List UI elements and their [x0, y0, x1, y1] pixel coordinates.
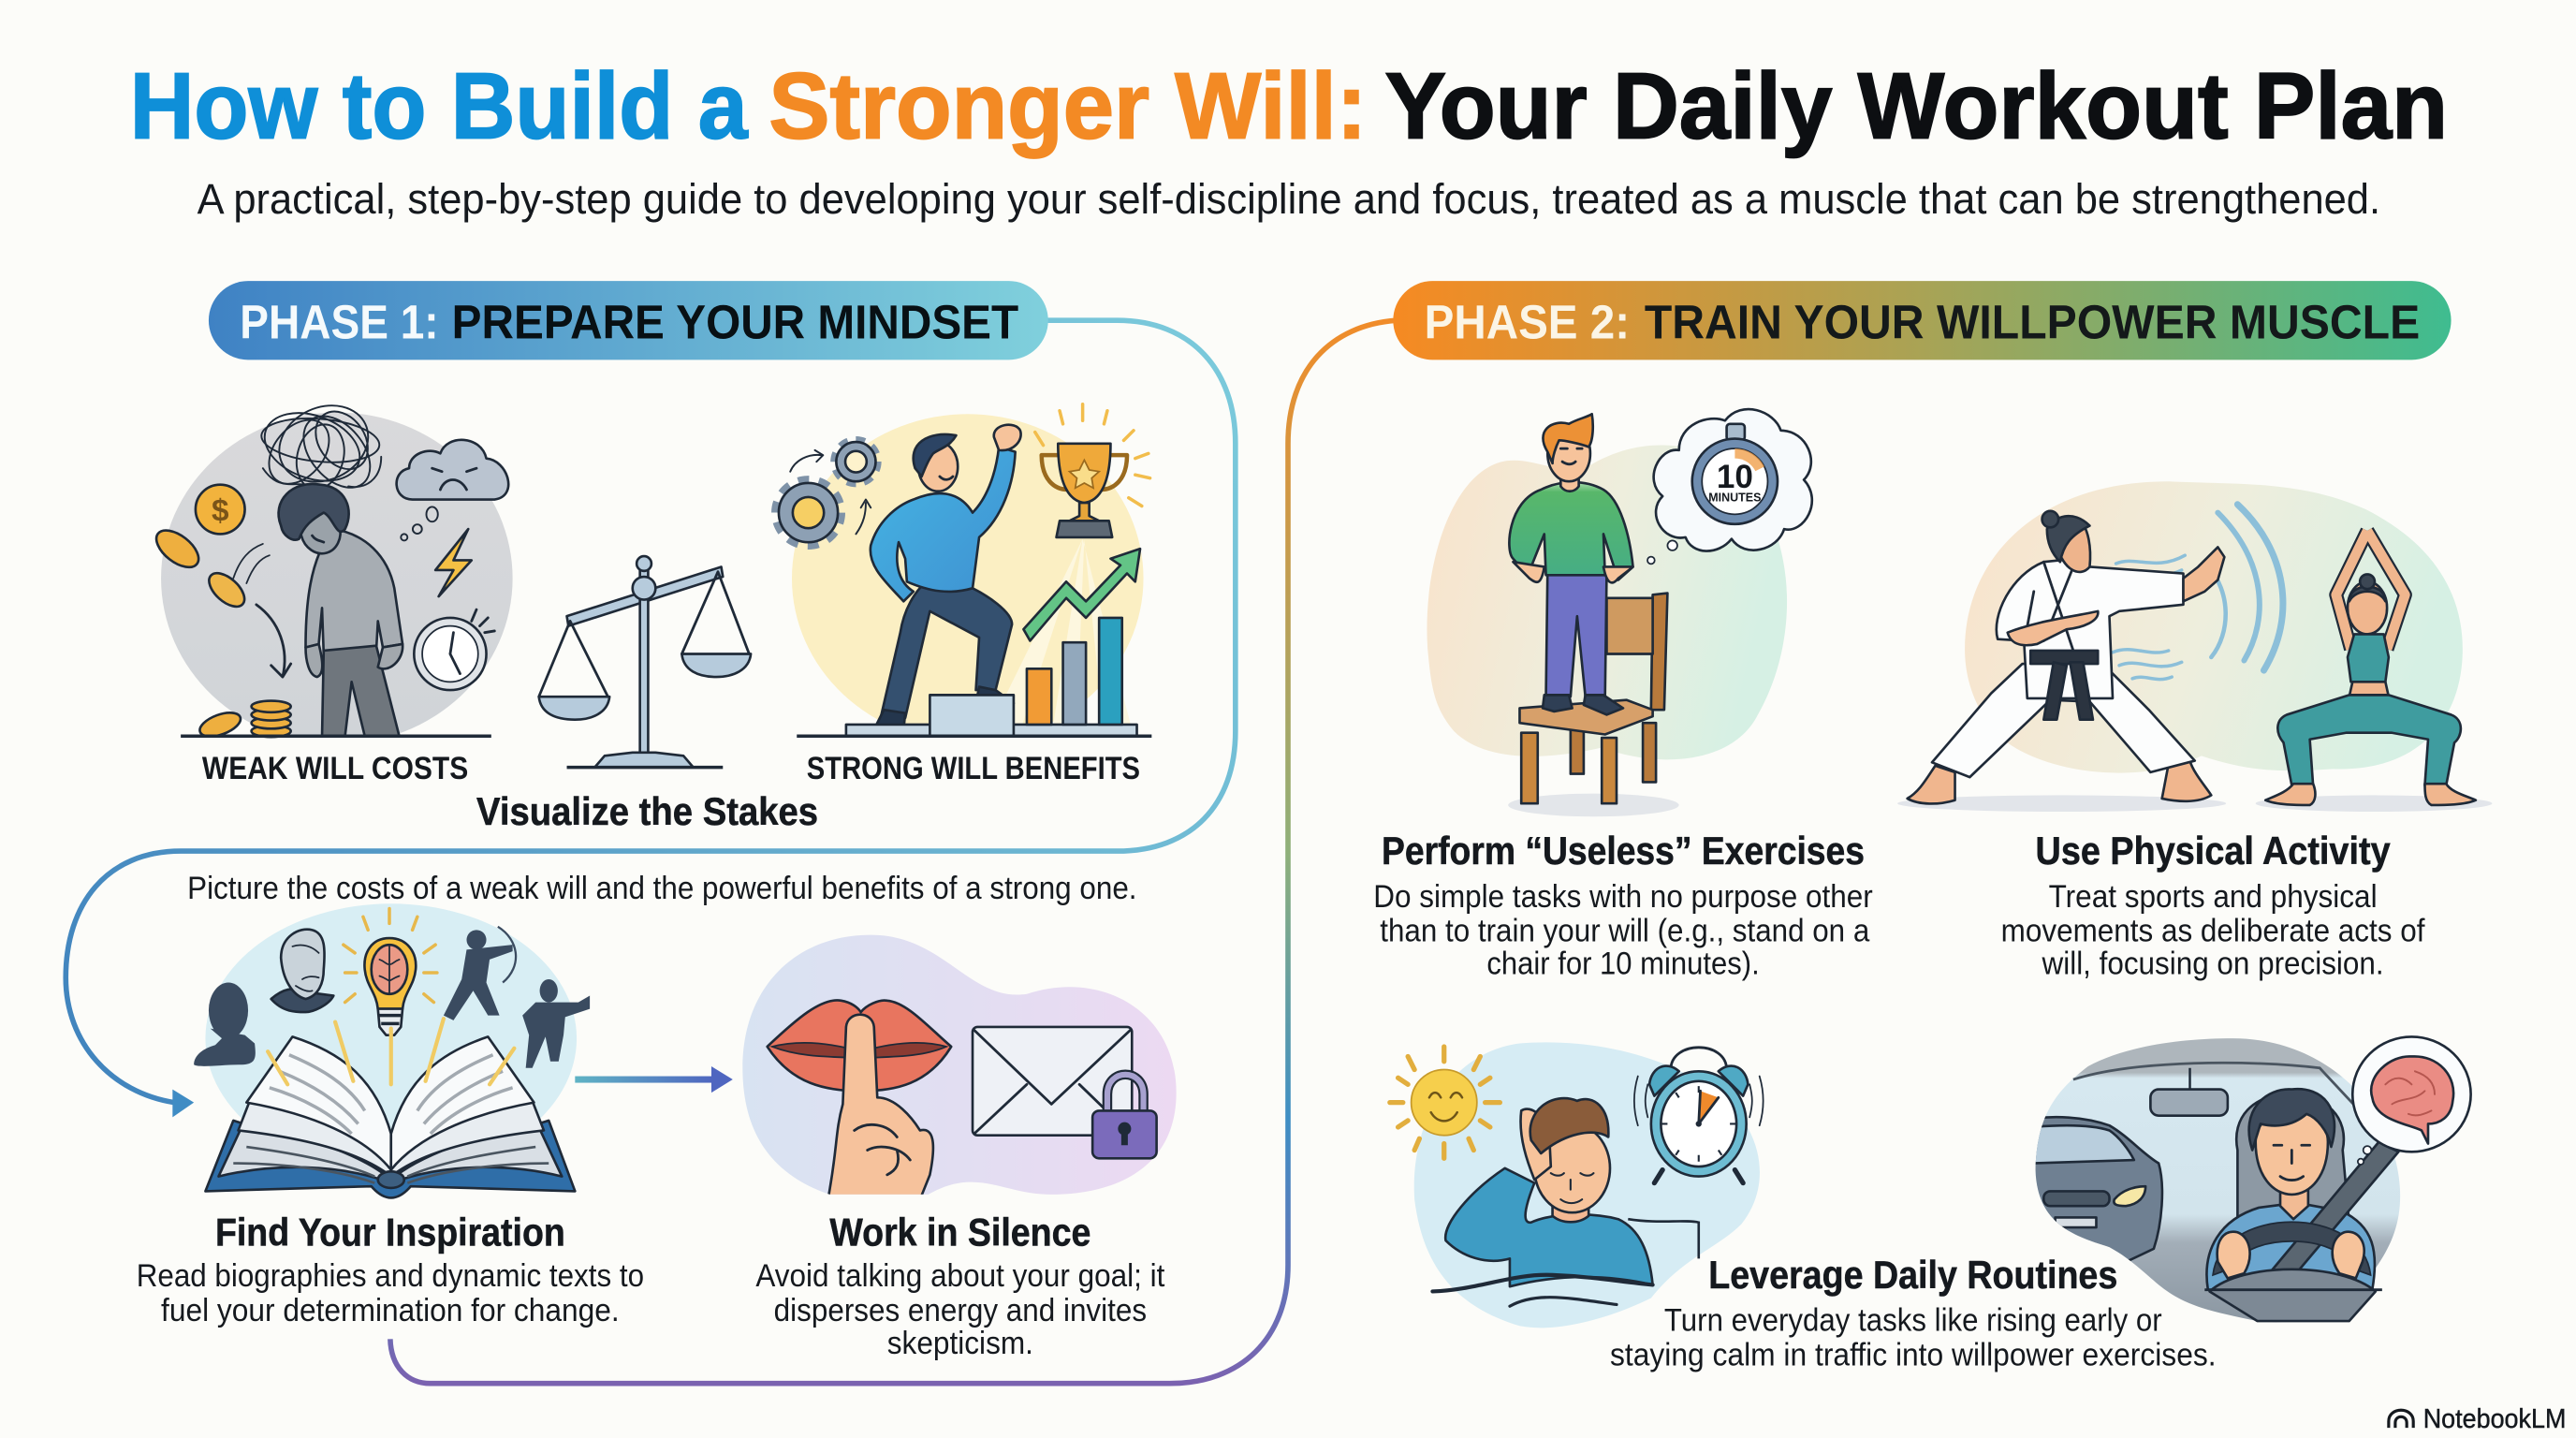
figure: slumped person: [279, 484, 402, 736]
icon: envelope: [973, 1027, 1132, 1136]
sunbeams: [986, 539, 1134, 736]
portrait: bearded elder: [271, 930, 333, 1012]
icon: rear view mirror: [2150, 1068, 2228, 1116]
text: visualize description: Picture the costs of a weak will and the powerful benefits of a strong one.: [187, 871, 1137, 906]
figure: man on chair: [1509, 414, 1633, 714]
heading: visualize the stakes: Visualize the Stakes: [476, 789, 818, 833]
figure: calm driver: [2204, 1089, 2398, 1321]
thought bubble: ten minutes stopwatch: 10: [1717, 459, 1753, 495]
thought bubble: brain: [2352, 1036, 2471, 1165]
phase 2 header: [1393, 281, 2452, 360]
text: physical activity: will, focusing on precision.: [2042, 946, 2384, 982]
text: physical activity: Treat sports and physical: [2049, 879, 2378, 915]
title: Your Daily Workout Plan: [1385, 53, 2448, 158]
illustration: traffic routine: [2021, 1036, 2471, 1322]
ground line: [797, 735, 1151, 737]
figure: yoga pose: [2265, 531, 2476, 805]
illustration: weak will costs: [150, 391, 513, 744]
icon: tangled thoughts: [256, 391, 384, 500]
phase 1 header: PHASE 1:: [240, 296, 439, 349]
arrow: inspiration to silence: [575, 1066, 733, 1093]
text: physical activity: movements as deliberate acts of: [2001, 914, 2425, 949]
icon: dollar coin: [196, 485, 245, 534]
heading: leverage daily routines: Leverage Daily Routines: [1708, 1253, 2117, 1297]
text: find your inspiration: [137, 1258, 644, 1328]
icon: chair: [1519, 594, 1667, 803]
icon: alarm clock: [1634, 1048, 1764, 1183]
text: useless exercises: chair for 10 minutes).: [1486, 946, 1760, 982]
text: useless exercises: than to train your will (e.g., stand on a: [1380, 914, 1870, 949]
text: useless exercises: [1373, 879, 1873, 982]
figure: triumphant person: [871, 425, 1021, 729]
icon: dollar coin: $: [212, 493, 229, 528]
icon: padlock: [1092, 1075, 1157, 1158]
phase 2 header: TRAIN YOUR WILLPOWER MUSCLE: [1645, 296, 2420, 349]
text: work in silence: skepticism.: [887, 1326, 1033, 1361]
icon: coin stack: [197, 701, 291, 741]
connector: phase 1 loop: [66, 320, 1236, 1117]
icon: pillow: [1628, 1219, 1699, 1258]
heading: useless exercises: Perform “Useless” Exercises: [1382, 829, 1865, 873]
text: find your inspiration: fuel your determination for change.: [161, 1293, 620, 1328]
text: leverage daily routines: Turn everyday tasks like rising early or: [1664, 1303, 2162, 1339]
illustration: find your inspiration: [194, 903, 590, 1197]
icon: falling coins: [150, 523, 291, 677]
figure: karate stance: [1908, 511, 2224, 803]
shadow: [1508, 794, 1679, 816]
heading: physical activity: Use Physical Activity: [2036, 829, 2391, 873]
icon: trophy: [1035, 404, 1150, 537]
label: weak will costs: WEAK WILL COSTS: [202, 751, 468, 786]
ground line: [181, 735, 491, 737]
car interior frame: [2073, 1063, 2365, 1117]
text: useless exercises: Do simple tasks with no purpose other: [1373, 879, 1873, 915]
silhouette: portrait man: [194, 983, 256, 1066]
silhouette: archer: [444, 927, 516, 1020]
text: work in silence: disperses energy and invites: [774, 1293, 1147, 1328]
thought bubble: ten minutes stopwatch: MINUTES: [1708, 490, 1762, 504]
illustration: useless exercises: [1427, 409, 1812, 816]
icon: thought dots: [401, 506, 438, 540]
text: work in silence: [755, 1258, 1165, 1361]
chart: rising bars with arrow: [846, 549, 1140, 736]
blanket: [1432, 1275, 1653, 1306]
illustration: work in silence: [742, 935, 1177, 1208]
subtitle: A practical, step-by-step guide to developing your self-discipline and focus, treated as a muscle that can be strengthened.: [198, 175, 2380, 223]
text: physical activity: [2001, 879, 2425, 982]
icon: lightning: [435, 529, 472, 596]
thought bubble: ten minutes stopwatch: [1647, 409, 1812, 564]
icon: clock: [414, 609, 494, 690]
heading: work in silence: Work in Silence: [829, 1210, 1090, 1254]
title: How to Build a: [130, 53, 749, 158]
phase 2 header: PHASE 2:: [1425, 296, 1630, 349]
illustration: strong will benefits: [779, 404, 1151, 772]
connector: phase 2 loop: [390, 320, 1397, 1384]
heading: find your inspiration: Find Your Inspiration: [215, 1210, 565, 1254]
figure: waking person: [1445, 1098, 1653, 1286]
shadows: [1897, 795, 2492, 812]
text: work in silence: Avoid talking about your goal; it: [755, 1258, 1165, 1294]
text: find your inspiration: Read biographies and dynamic texts to: [137, 1258, 644, 1294]
icon: smiling sun: [1390, 1047, 1500, 1158]
text: leverage daily routines: [1610, 1303, 2217, 1372]
icon: hushing hand: [827, 1015, 933, 1208]
phase 1 header: PREPARE YOUR MINDSET: [452, 296, 1018, 349]
phase 1 header: [209, 281, 1048, 360]
icon: sad cloud: [397, 440, 508, 500]
arrow head: into inspiration: [172, 1090, 194, 1117]
icon: open book: [205, 1019, 575, 1197]
text: leverage daily routines: staying calm in traffic into willpower exercises.: [1610, 1337, 2217, 1372]
title: [130, 53, 2448, 158]
icon: balance scale: [539, 556, 751, 768]
label: strong will benefits: STRONG WILL BENEFITS: [807, 751, 1140, 786]
icon: car ahead: [2035, 1116, 2164, 1261]
icon: lips: [768, 1000, 951, 1091]
logo: NotebookLM: NotebookLM: [2423, 1404, 2566, 1434]
title: Stronger Will:: [768, 53, 1367, 158]
illustration: morning routine: [1390, 1042, 1764, 1328]
silhouette: boxer: [522, 979, 590, 1068]
illustration: physical activity: [1897, 481, 2492, 812]
icon: gears: [779, 442, 875, 542]
icon: idea bulb with brain: [344, 909, 437, 1035]
icon: wind arcs: [2113, 505, 2283, 680]
